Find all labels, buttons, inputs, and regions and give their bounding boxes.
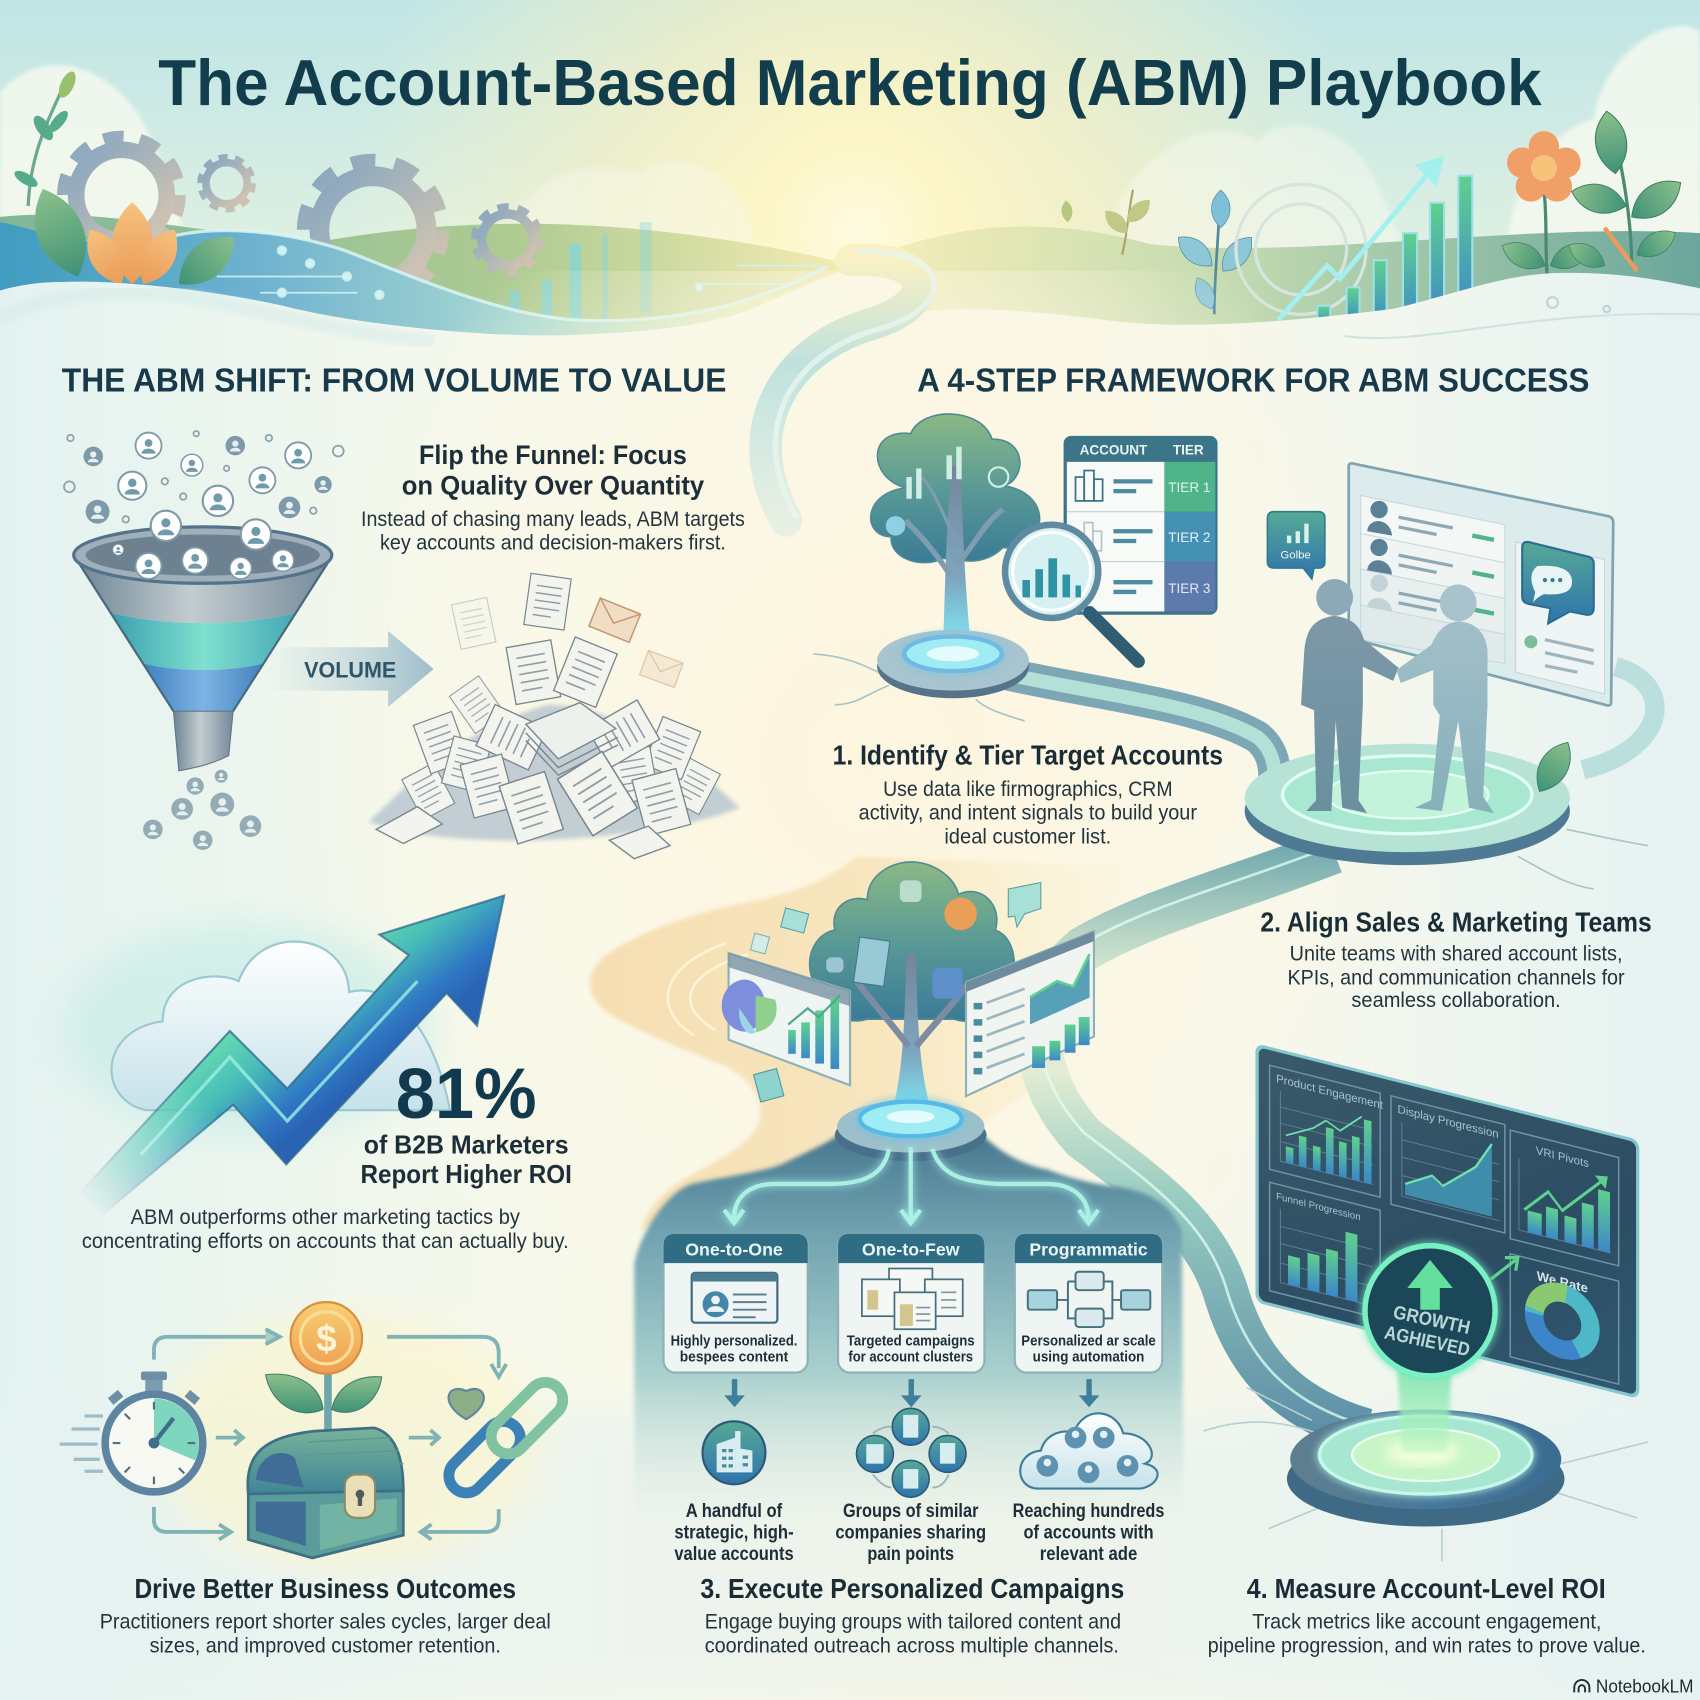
card: one-to-one <box>664 1234 808 1373</box>
text: outcomes: sizes, and improved customer retention. <box>150 1632 501 1657</box>
panel: step 4 measure ROI <box>1203 1043 1648 1657</box>
card: one-to-few: One-to-Few <box>862 1239 960 1259</box>
panel: step 2 align teams <box>1245 463 1652 1012</box>
screen: shared account dashboard <box>1349 463 1613 705</box>
icon: magnifying glass <box>1005 525 1138 661</box>
text: audience labels: A handful of <box>686 1500 783 1522</box>
rising chart <box>1278 156 1472 327</box>
header landscape banner <box>0 26 1700 694</box>
icon: filtered contacts <box>143 770 261 850</box>
stat description <box>82 1204 569 1253</box>
rising bars <box>510 222 652 323</box>
text: audience labels: strategic, high- <box>674 1521 794 1543</box>
icon: speech bubble chart: Golbe <box>1280 549 1311 561</box>
card: one-to-one: One-to-One <box>685 1239 783 1259</box>
text: step 3: coordinated outreach across multiple channels. <box>705 1632 1119 1657</box>
card: one-to-one: Highly personalized. <box>671 1332 797 1349</box>
body wave edge <box>0 265 1700 694</box>
NotebookLM watermark: NotebookLM <box>1596 1675 1693 1696</box>
stat description: ABM outperforms other marketing tactics by <box>131 1204 520 1229</box>
text: step 2: Unite teams with shared account lists, <box>1290 941 1622 966</box>
icon: data tree <box>813 414 1040 721</box>
heading: 4-step framework: A 4-STEP FRAMEWORK FOR ABM SUCCESS <box>917 362 1589 399</box>
arrow: volume <box>266 631 434 707</box>
chart: pipeline: Funnel Progression <box>1276 1191 1361 1223</box>
text: step 1: ideal customer list. <box>944 823 1111 848</box>
road between step platforms <box>1008 674 1279 824</box>
arrows: cards to audiences <box>724 1379 1099 1407</box>
icon: audience cloud <box>1020 1413 1158 1489</box>
chart: progression <box>1398 1104 1499 1221</box>
platform 2 <box>1245 735 1648 889</box>
table: account tiers: TIER 1 <box>1168 480 1210 495</box>
icon: speech bubble chart <box>1267 512 1325 579</box>
text: step 2 <box>1260 905 1652 1012</box>
panel: business outcomes <box>60 1302 570 1657</box>
panel: flip the funnel <box>64 431 745 859</box>
dashboard <box>1255 1043 1639 1399</box>
text: flip the funnel: Flip the Funnel: Focus <box>419 439 687 470</box>
text: step 4: 4. Measure Account-Level ROI <box>1247 1572 1606 1604</box>
glowing beam <box>1396 1350 1453 1453</box>
heading: ABM shift: THE ABM SHIFT: FROM VOLUME TO VALUE <box>62 362 726 399</box>
panel: right dashboard window <box>966 931 1094 1096</box>
text: step 4 <box>1208 1572 1646 1657</box>
icon: stopwatch <box>60 1371 203 1492</box>
text: outcomes: Practitioners report shorter sales cycles, larger deal <box>100 1608 551 1633</box>
left leaves <box>12 69 246 298</box>
badge: growth achieved: AGHIEVED <box>1383 1323 1472 1361</box>
platform 1 <box>877 635 1029 698</box>
card: one-to-few: for account clusters <box>848 1349 973 1366</box>
platform 4 <box>1203 1388 1648 1561</box>
arrows: tree to cards <box>724 1147 1098 1223</box>
text: step 2: KPIs, and communication channels for <box>1287 964 1625 989</box>
text: audience labels: companies sharing <box>835 1521 986 1543</box>
card: programmatic <box>1015 1234 1162 1373</box>
title: The Account-Based Marketing (ABM) Playbook <box>158 46 1542 119</box>
text: step 3: 3. Execute Personalized Campaigns <box>700 1572 1124 1604</box>
text: audience labels <box>674 1500 1165 1565</box>
chart: product engagement <box>1276 1073 1384 1187</box>
table: account tiers <box>1064 436 1218 615</box>
text: step 3: Engage buying groups with tailored content and <box>705 1608 1121 1633</box>
icon: account cluster <box>857 1408 966 1497</box>
stat label <box>360 1130 572 1189</box>
chart: product engagement: Product Engagement <box>1276 1073 1384 1112</box>
stat description: concentrating efforts on accounts that can actually buy. <box>82 1228 569 1253</box>
winding road swoosh <box>590 251 1655 1431</box>
text: flip the funnel: Instead of chasing many leads, ABM targets <box>361 506 745 531</box>
text: audience labels: value accounts <box>674 1543 794 1565</box>
icon: pile of paper <box>369 573 739 859</box>
card: one-to-one: bespees content <box>680 1349 788 1366</box>
icon: treasure chest with sprout <box>248 1302 403 1558</box>
icon: prospect bubbles <box>64 431 344 524</box>
right plants <box>1061 109 1689 314</box>
icon: treasure chest with sprout: $ <box>316 1318 337 1359</box>
card: one-to-few <box>838 1234 984 1373</box>
platform 3 <box>835 1100 987 1161</box>
icon: funnel <box>74 511 332 771</box>
text: step 1 <box>833 738 1223 848</box>
panel: left dashboard window <box>722 953 850 1085</box>
arrow: volume: VOLUME <box>304 658 396 683</box>
card: programmatic: Personalized ar scale <box>1021 1332 1156 1349</box>
text: flip the funnel: key accounts and decision-makers first. <box>380 530 726 555</box>
chart: pivots <box>1519 1141 1611 1253</box>
text: audience labels: pain points <box>867 1543 954 1565</box>
text: outcomes <box>100 1572 551 1657</box>
chart: win rate donut <box>1524 1265 1601 1369</box>
text: audience labels: Groups of similar <box>843 1500 979 1522</box>
figure: left person <box>1301 579 1399 813</box>
panel: step 3 personalized campaigns <box>634 862 1184 1657</box>
text: step 4: Track metrics like account engagement, <box>1252 1608 1601 1633</box>
arrows: cycle <box>154 1329 506 1540</box>
card: one-to-few: Targeted campaigns <box>847 1332 975 1349</box>
text: outcomes: Drive Better Business Outcomes <box>134 1572 516 1604</box>
card: programmatic: Programmatic <box>1029 1239 1148 1259</box>
text: flip the funnel <box>361 439 745 555</box>
table: account tiers: ACCOUNT <box>1080 442 1148 457</box>
chart: progression: Display Progression <box>1398 1104 1499 1141</box>
icon: single account building <box>703 1421 765 1484</box>
stat label: of B2B Marketers <box>364 1130 569 1160</box>
column background <box>634 1134 1184 1540</box>
table: account tiers: TIER <box>1173 442 1204 457</box>
text: step 1: 1. Identify & Tier Target Accounts <box>833 738 1223 770</box>
green hills <box>0 215 857 325</box>
text: flip the funnel: on Quality Over Quantity <box>402 469 704 500</box>
stat: 81%: 81% <box>396 1054 537 1134</box>
text: step 1: Use data like firmographics, CRM <box>883 776 1173 801</box>
chart: pivots: VRI Pivots <box>1536 1145 1589 1170</box>
text: audience labels: Reaching hundreds <box>1013 1500 1165 1522</box>
text: step 1: activity, and intent signals to build your <box>859 800 1197 825</box>
stat label: Report Higher ROI <box>360 1159 572 1189</box>
badge: growth achieved <box>1365 1246 1518 1376</box>
gears <box>67 140 538 295</box>
icon: cloud <box>112 942 450 1110</box>
text: step 2: 2. Align Sales & Marketing Teams <box>1260 905 1652 937</box>
icon: chain link and heart <box>442 1375 570 1500</box>
chart: growth arrow <box>81 896 504 1214</box>
icon: campaign tree <box>750 862 1041 1108</box>
clouds in sky <box>0 26 1700 260</box>
panel: 81 percent statistic <box>65 896 572 1253</box>
text: audience labels: relevant ade <box>1040 1543 1137 1565</box>
blue wave <box>0 222 857 347</box>
text: step 3 <box>700 1572 1124 1657</box>
badge: growth achieved: GROWTH <box>1391 1302 1472 1339</box>
figure: right person <box>1396 584 1494 813</box>
table: account tiers: TIER 2 <box>1168 530 1210 545</box>
text: step 2: seamless collaboration. <box>1351 987 1561 1012</box>
text: step 4: pipeline progression, and win rates to prove value. <box>1208 1632 1646 1657</box>
table: account tiers: TIER 3 <box>1168 581 1210 596</box>
chart: win rate donut: We Rate <box>1537 1268 1588 1296</box>
text: audience labels: of accounts with <box>1023 1521 1154 1543</box>
chart: pipeline <box>1276 1191 1373 1306</box>
panel: step 1 identify and tier <box>813 414 1223 848</box>
card: programmatic: using automation <box>1033 1349 1144 1366</box>
